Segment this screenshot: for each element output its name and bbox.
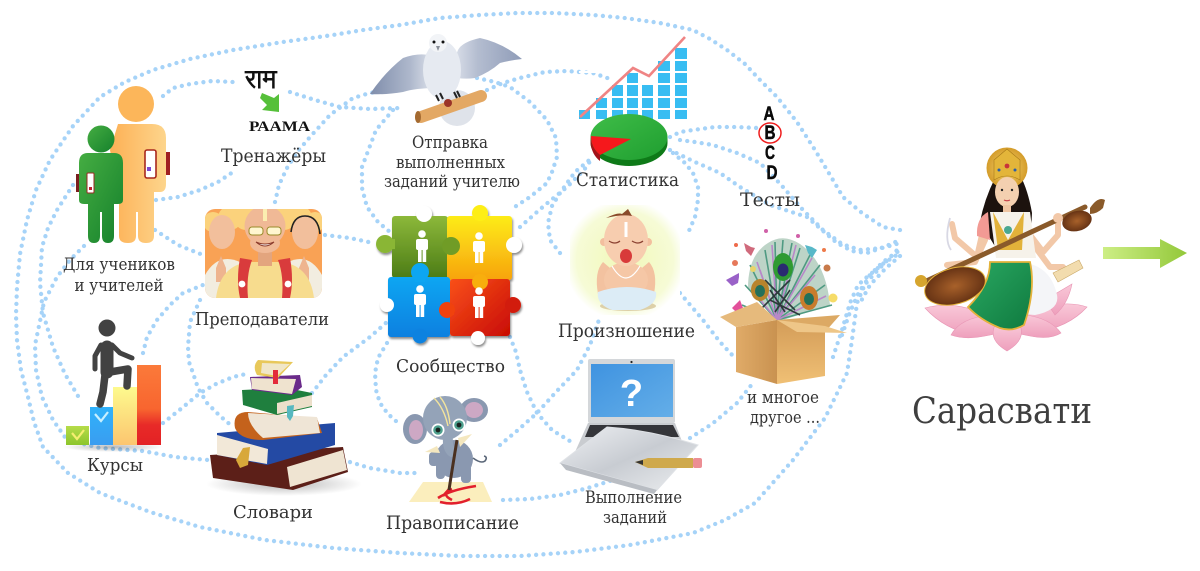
icon: singing baby bbox=[570, 205, 680, 315]
puzzle pieces bbox=[376, 205, 522, 345]
label: send completed assignments to teacher: выполненных bbox=[396, 153, 506, 172]
arrow: green pointing right bbox=[1103, 239, 1187, 268]
illustration: Saraswati on lotus with veena bbox=[915, 148, 1105, 351]
book bbox=[1053, 260, 1083, 282]
arms bbox=[947, 218, 1063, 267]
chart: statistics bars with trend line bbox=[579, 37, 687, 119]
label: for students and teachers bbox=[63, 255, 175, 296]
chart: pie with red slice bbox=[590, 114, 668, 166]
icon: student and teacher figures bbox=[76, 86, 170, 243]
icon: test answers A B C D bbox=[759, 104, 781, 184]
label: spelling: Правописание bbox=[386, 513, 519, 534]
icon: test answers A B C D: D bbox=[766, 163, 778, 184]
label: doing assignments: заданий bbox=[603, 508, 667, 527]
label: send completed assignments to teacher bbox=[384, 133, 520, 191]
label: courses: Курсы bbox=[87, 455, 143, 476]
hair bbox=[980, 175, 1032, 250]
label: and much more: другое ... bbox=[750, 408, 820, 427]
icon: stack of books bbox=[206, 360, 362, 496]
label: send completed assignments to teacher: Отправка bbox=[412, 133, 488, 152]
icon: test answers A B C D: A bbox=[764, 104, 775, 125]
dotted connection network bbox=[16, 13, 900, 556]
icon: elephant writing calligraphy bbox=[403, 396, 492, 503]
label: dictionaries: Словари bbox=[233, 502, 313, 523]
veena neck bbox=[922, 207, 1085, 283]
title: Saraswati: Сарасвати bbox=[912, 391, 1092, 432]
icon: box with peacock feathers and butterflies bbox=[720, 229, 847, 384]
icon: test answers A B C D: B bbox=[764, 123, 776, 144]
label: send completed assignments to teacher: заданий учителю bbox=[384, 172, 520, 191]
icon: teachers portrait bbox=[203, 206, 325, 298]
face bbox=[995, 177, 1019, 207]
label: doing assignments bbox=[585, 488, 682, 527]
icon: trainers ram to raama bbox=[244, 61, 310, 135]
icon: trainers ram to raama: РААМА bbox=[249, 119, 310, 135]
icon: trainers ram to raama: राम bbox=[244, 61, 277, 101]
icon: courses steps with climbing person bbox=[63, 320, 163, 452]
person figures bbox=[414, 230, 485, 318]
icon: test answers A B C D: C bbox=[765, 143, 775, 164]
icon: dove carrying scroll bbox=[370, 34, 522, 126]
climbing person bbox=[95, 345, 132, 404]
butterflies bbox=[726, 229, 838, 314]
mala bbox=[947, 218, 951, 250]
icon: community puzzle bbox=[376, 205, 522, 345]
label: pronunciation: Произношение bbox=[558, 321, 695, 342]
label: and much more bbox=[747, 388, 820, 427]
icon: laptop with paper and pencil: ? bbox=[620, 373, 643, 415]
icon: laptop with paper and pencil bbox=[560, 359, 702, 494]
hand on veena bbox=[1053, 213, 1063, 223]
label: trainers: Тренажёры bbox=[221, 145, 326, 167]
label: for students and teachers: и учителей bbox=[74, 276, 164, 296]
label: teachers: Преподаватели bbox=[195, 309, 329, 330]
label: community: Сообщество bbox=[396, 356, 505, 377]
blouse and torso bbox=[977, 212, 990, 240]
label: doing assignments: Выполнение bbox=[585, 488, 682, 507]
label: for students and teachers: Для учеников bbox=[63, 255, 175, 275]
skirt and legs bbox=[970, 262, 1057, 315]
halo and crown bbox=[986, 148, 1028, 188]
label: and much more: и многое bbox=[747, 388, 819, 407]
label: statistics: Статистика bbox=[576, 170, 679, 191]
label: tests: Тесты bbox=[740, 189, 800, 211]
lotus bbox=[925, 284, 1087, 351]
